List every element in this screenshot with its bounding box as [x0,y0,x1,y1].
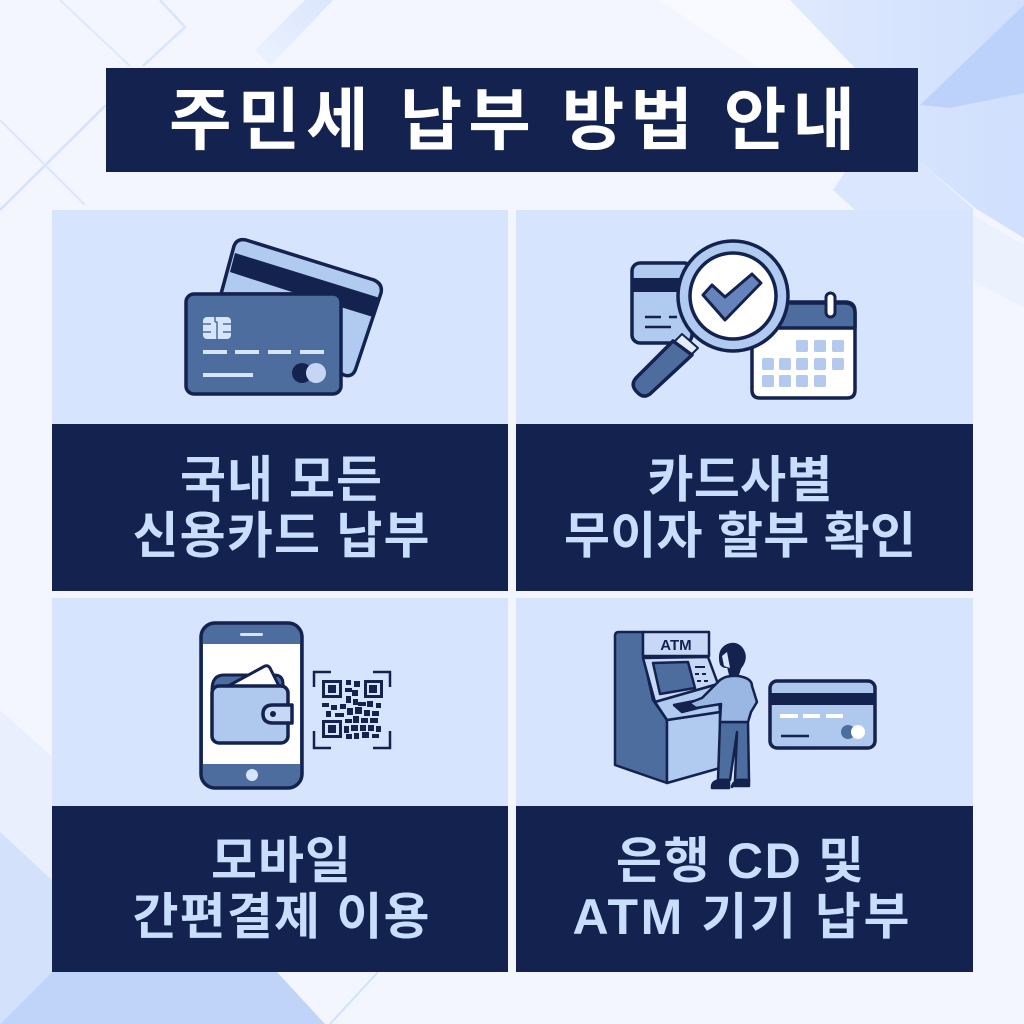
panel: interest free [516,210,973,591]
label: credit cards: 국내 모든 [180,452,382,508]
label: mobile: 간편결제 이용 [132,889,430,945]
icon: ATM with person: ATM [660,637,692,654]
title banner [106,68,918,172]
label: credit cards [132,452,430,564]
icon: ATM with person [615,632,757,788]
panel: ATM [516,598,973,972]
icon: bank card [770,681,875,748]
title text: 주민세 납부 방법 안내 [169,83,855,159]
icon: phone with wallet [201,623,302,788]
icon: credit cards [186,240,381,394]
panel: mobile [52,598,508,972]
label: ATM [572,833,910,945]
label: interest free: 무이자 할부 확인 [564,508,916,564]
icon: card, magnifier and calendar [632,241,855,398]
panel: credit cards [52,210,508,591]
label: interest free [564,452,916,564]
label: mobile: 모바일 [211,833,351,889]
label: interest free: 카드사별 [648,452,832,508]
label: ATM: 은행 CD 및 [616,833,864,889]
label: credit cards: 신용카드 납부 [132,508,430,564]
icon: QR code [314,672,390,748]
label: mobile [132,833,430,945]
label: ATM: ATM 기기 납부 [572,889,910,945]
